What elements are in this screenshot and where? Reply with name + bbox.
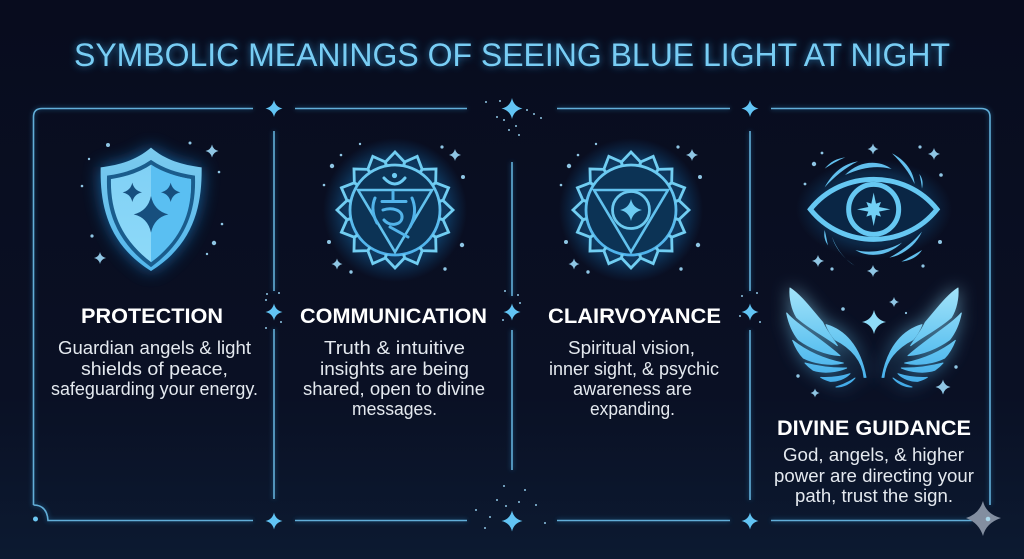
text: clairvoyance: awareness are bbox=[573, 379, 692, 399]
heading: communication: COMMUNICATION bbox=[300, 305, 487, 328]
text: clairvoyance bbox=[549, 338, 719, 419]
panel: clairvoyance bbox=[548, 138, 721, 419]
text: communication: Truth & intuitive bbox=[324, 338, 465, 358]
frame and dividers bbox=[33, 108, 990, 522]
text: communication: messages. bbox=[352, 399, 437, 419]
text: protection bbox=[51, 338, 258, 399]
icon: shield bbox=[81, 142, 223, 271]
text: protection: Guardian angels & light bbox=[58, 338, 251, 358]
heading: divine guidance: DIVINE GUIDANCE bbox=[777, 417, 971, 440]
text: protection: shields of peace, bbox=[81, 359, 228, 379]
text: clairvoyance: expanding. bbox=[590, 399, 675, 419]
title: SYMBOLIC MEANINGS OF SEEING BLUE LIGHT AT NIGHT bbox=[74, 37, 950, 73]
text: divine guidance: God, angels, & higher bbox=[783, 445, 964, 465]
text: communication: insights are being bbox=[320, 359, 469, 379]
icon: all-seeing eye bbox=[796, 144, 952, 277]
title: SYMBOLIC MEANINGS OF SEEING BLUE LIGHT AT NIGHT bbox=[74, 37, 950, 73]
text: divine guidance: path, trust the sign. bbox=[795, 486, 953, 506]
icon: angel wings bbox=[787, 288, 961, 398]
heading: clairvoyance: CLAIRVOYANCE bbox=[548, 305, 721, 328]
text: divine guidance: power are directing your bbox=[774, 466, 974, 486]
panel: divine guidance bbox=[774, 144, 974, 506]
icon: throat chakra with seed syllable bbox=[323, 138, 467, 282]
text: communication bbox=[303, 338, 485, 419]
heading: protection: PROTECTION bbox=[81, 305, 223, 328]
text: protection: safeguarding your energy. bbox=[51, 379, 258, 399]
text: clairvoyance: inner sight, & psychic bbox=[549, 359, 719, 379]
panel: communication bbox=[300, 138, 487, 419]
panel: protection bbox=[51, 142, 258, 399]
text: clairvoyance: Spiritual vision, bbox=[568, 338, 695, 358]
icon: third eye chakra bbox=[559, 138, 703, 282]
ornament stars on frame bbox=[265, 98, 761, 532]
text: communication: shared, open to divine bbox=[303, 379, 485, 399]
icon: corner sparkle watermark bbox=[966, 501, 1001, 536]
text: divine guidance bbox=[774, 445, 974, 506]
